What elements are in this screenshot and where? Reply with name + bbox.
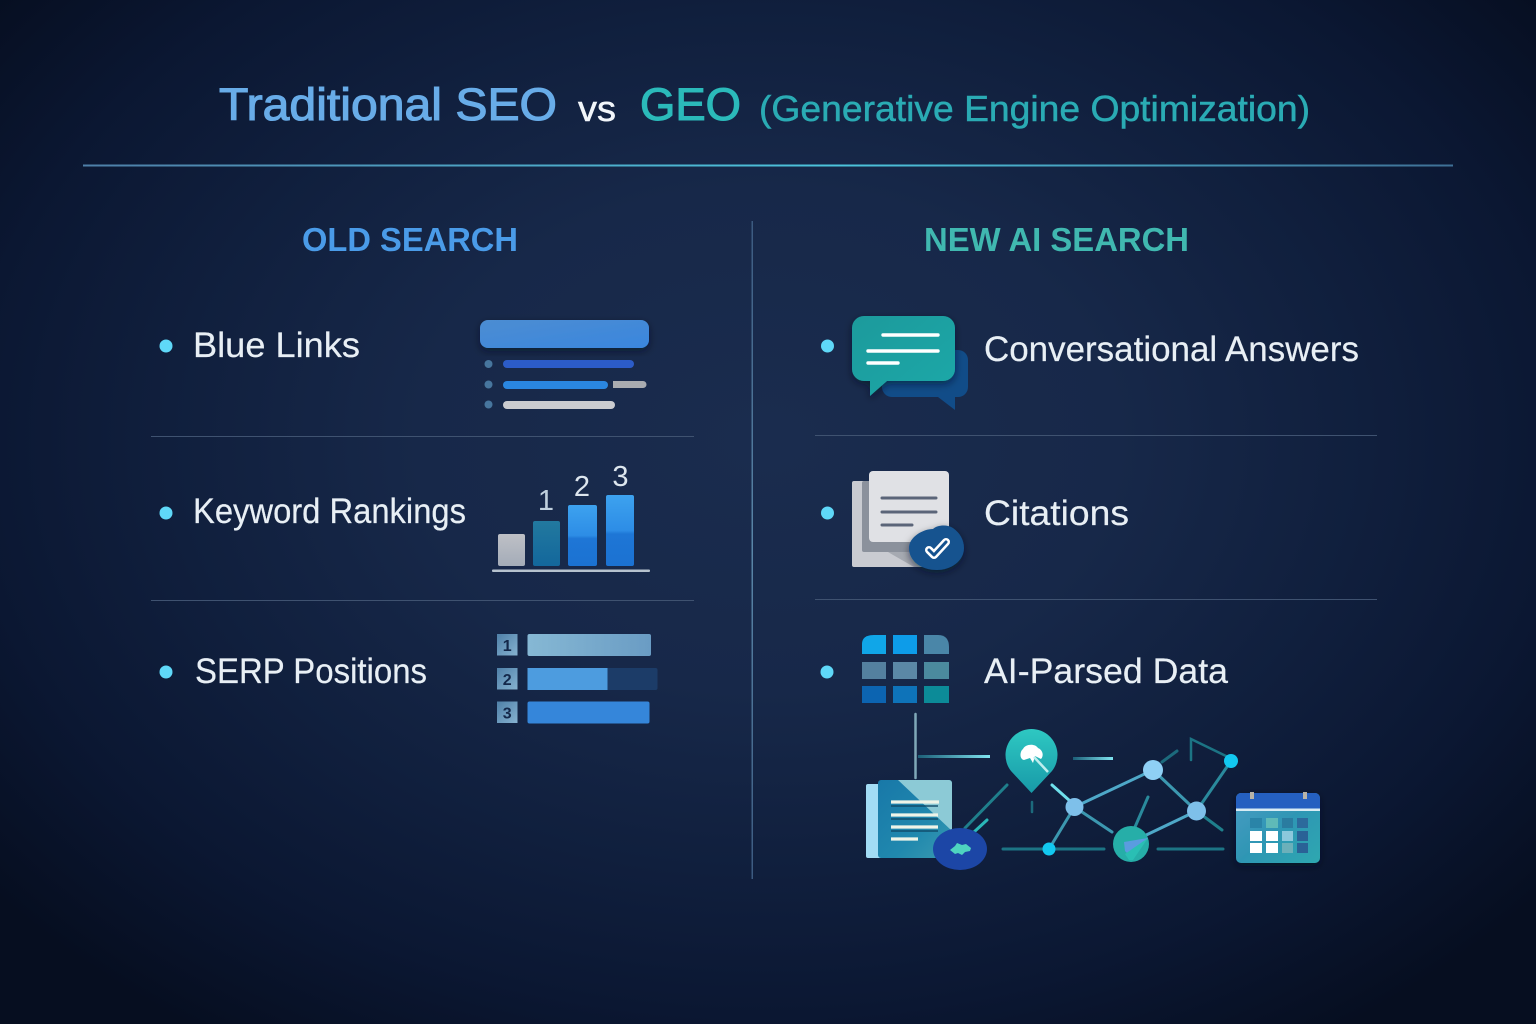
icon: chat bubbles: [852, 316, 968, 410]
panel: old search: [151, 221, 694, 724]
panel: new ai search: [815, 221, 1377, 870]
chart: serp position bars: [497, 634, 658, 724]
connector lines: [916, 714, 1231, 849]
heading: old search: OLD SEARCH: [302, 221, 518, 258]
item: conversational answers: Conversational Answers: [984, 330, 1359, 369]
item: blue links: Blue Links: [193, 326, 360, 365]
chart: keyword ranking bars: 1: [538, 485, 554, 517]
heading: new ai search: NEW AI SEARCH: [924, 221, 1189, 258]
chart: keyword ranking bars: 2: [574, 471, 590, 503]
title: (Generative Engine Optimization): [759, 88, 1310, 129]
item: citations: [821, 494, 1129, 533]
icon: check node: [1113, 826, 1149, 862]
icon: calendar: [1236, 792, 1320, 863]
title: GEO: [640, 79, 741, 130]
diagram: ai data network: [866, 714, 1320, 870]
icon: parsed document: [866, 780, 952, 858]
item: ai-parsed data: AI-Parsed Data: [984, 652, 1229, 691]
icon: blue links results: [480, 320, 649, 409]
title: Traditional SEO: [219, 79, 557, 130]
chart: keyword ranking bars: 3: [612, 461, 629, 493]
title: vs: [578, 88, 616, 129]
item: serp positions: SERP Positions: [195, 652, 427, 691]
chart: keyword ranking bars: [492, 461, 650, 572]
chart: serp position bars: 1: [503, 638, 512, 655]
item: citations: Citations: [984, 494, 1129, 533]
icon: citation documents: [852, 471, 964, 570]
title: [219, 79, 1310, 130]
icon: data grid: [862, 635, 949, 703]
item: conversational answers: [821, 330, 1359, 369]
icon: ai blob: [933, 828, 987, 870]
item: keyword rankings: Keyword Rankings: [193, 492, 466, 531]
chart: serp position bars: 2: [503, 672, 512, 689]
icon: map pin: [1006, 729, 1058, 793]
item: ai-parsed data: [820, 652, 1229, 691]
chart: serp position bars: 3: [503, 706, 512, 722]
network nodes: [1042, 754, 1238, 856]
